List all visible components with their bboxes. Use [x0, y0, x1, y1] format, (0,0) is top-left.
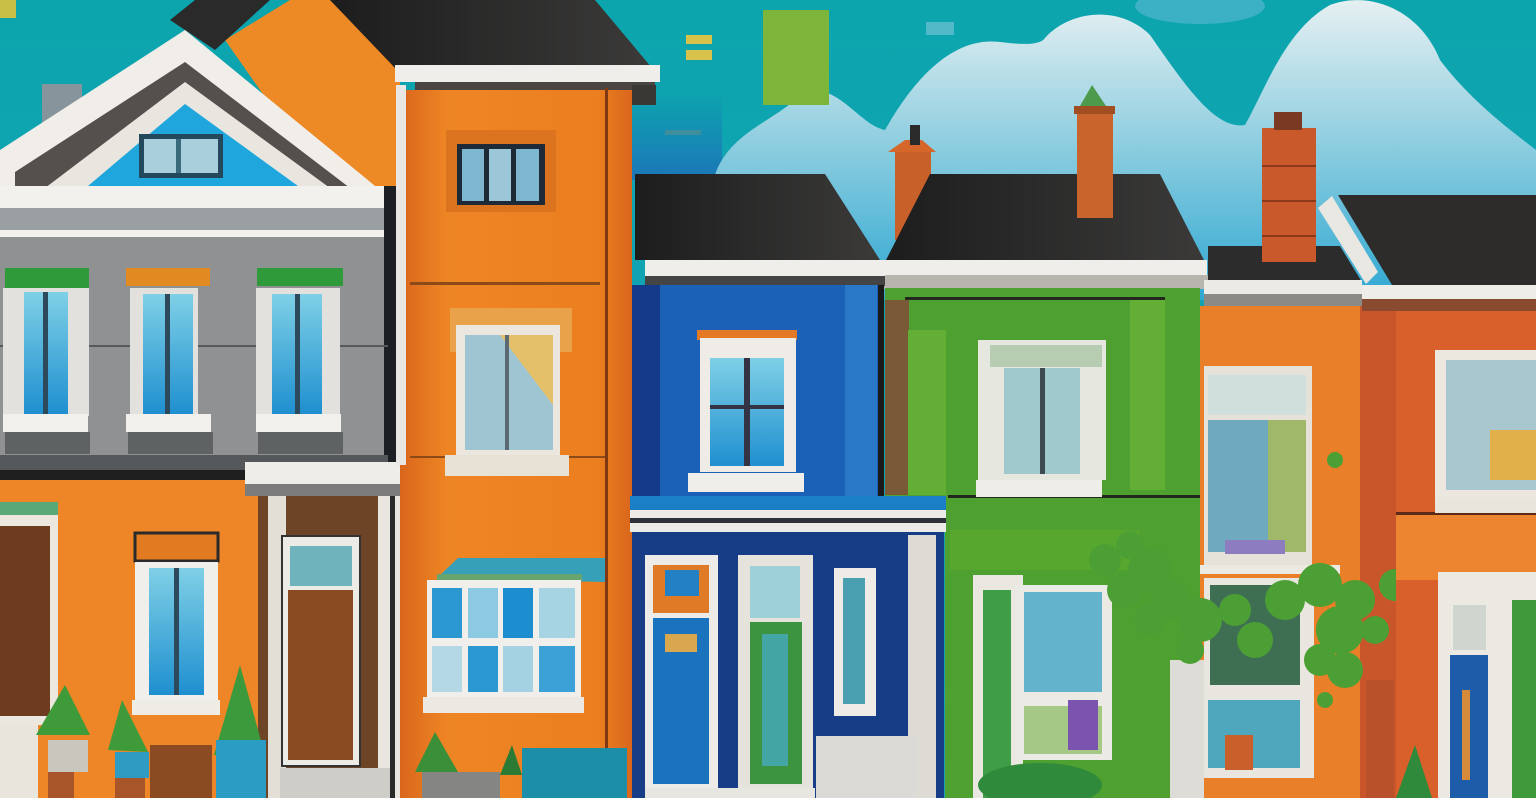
house 4: green [882, 85, 1208, 798]
grey wall [0, 237, 388, 472]
house 1: grey and orange [0, 0, 421, 798]
steps [816, 736, 916, 798]
lower window [423, 580, 584, 713]
lower window with white frame [973, 575, 1112, 798]
gable roof [0, 30, 380, 190]
white diagonal trim [1318, 196, 1378, 284]
upper windows [3, 268, 90, 454]
house 3: blue [630, 174, 946, 798]
window [976, 340, 1106, 497]
lower door [1438, 572, 1536, 798]
blue awning and trim [630, 496, 946, 532]
tree foliage [1089, 452, 1423, 708]
dark blue lower wall [632, 532, 944, 798]
black roof [1338, 195, 1536, 285]
clouds [632, 0, 1536, 300]
left brown door [0, 502, 58, 798]
black roof [330, 0, 652, 68]
gable blue triangle [88, 104, 298, 186]
white eave [1362, 285, 1536, 299]
window [688, 330, 804, 492]
planter and blue bin [415, 732, 627, 798]
upper window [1204, 366, 1312, 566]
green door [738, 555, 813, 798]
blue door [645, 555, 718, 798]
blue wall [632, 285, 882, 500]
white eave [1204, 280, 1362, 294]
potted plants [36, 665, 266, 798]
steps [280, 768, 390, 798]
white eave [885, 260, 1207, 276]
brown front door [282, 536, 360, 766]
lower window [1204, 578, 1314, 778]
house 5: orange [1089, 112, 1423, 798]
orange side roof [225, 0, 400, 190]
awning [437, 558, 605, 582]
black roof [635, 174, 880, 260]
shrubs at base [978, 763, 1102, 798]
cornice [0, 186, 386, 238]
brick column base [1366, 680, 1394, 798]
black roof [885, 174, 1205, 262]
white eave [645, 260, 885, 276]
brick chimney [1262, 112, 1316, 262]
black roof [1208, 246, 1362, 282]
gable window [139, 134, 223, 178]
orange wall [1200, 306, 1365, 798]
top window [446, 130, 556, 212]
house 2: orange [330, 0, 660, 798]
chimney left [888, 125, 936, 240]
chimney right [1074, 85, 1115, 218]
dark roof peak [170, 0, 270, 50]
distant sign: green panel and yellow marks [0, 0, 954, 135]
green wall [885, 288, 1200, 798]
narrow window [834, 568, 876, 716]
house 6: red-orange [1318, 195, 1536, 798]
white eave [395, 65, 660, 82]
middle window [445, 308, 572, 476]
door surround and portico [245, 462, 421, 798]
upper window [1435, 350, 1536, 513]
chimney vent [42, 84, 82, 130]
orange lower wall [0, 478, 265, 798]
lower window [132, 533, 220, 715]
orange wall [400, 90, 632, 798]
white post [1170, 660, 1204, 798]
red-orange wall [1396, 311, 1536, 798]
